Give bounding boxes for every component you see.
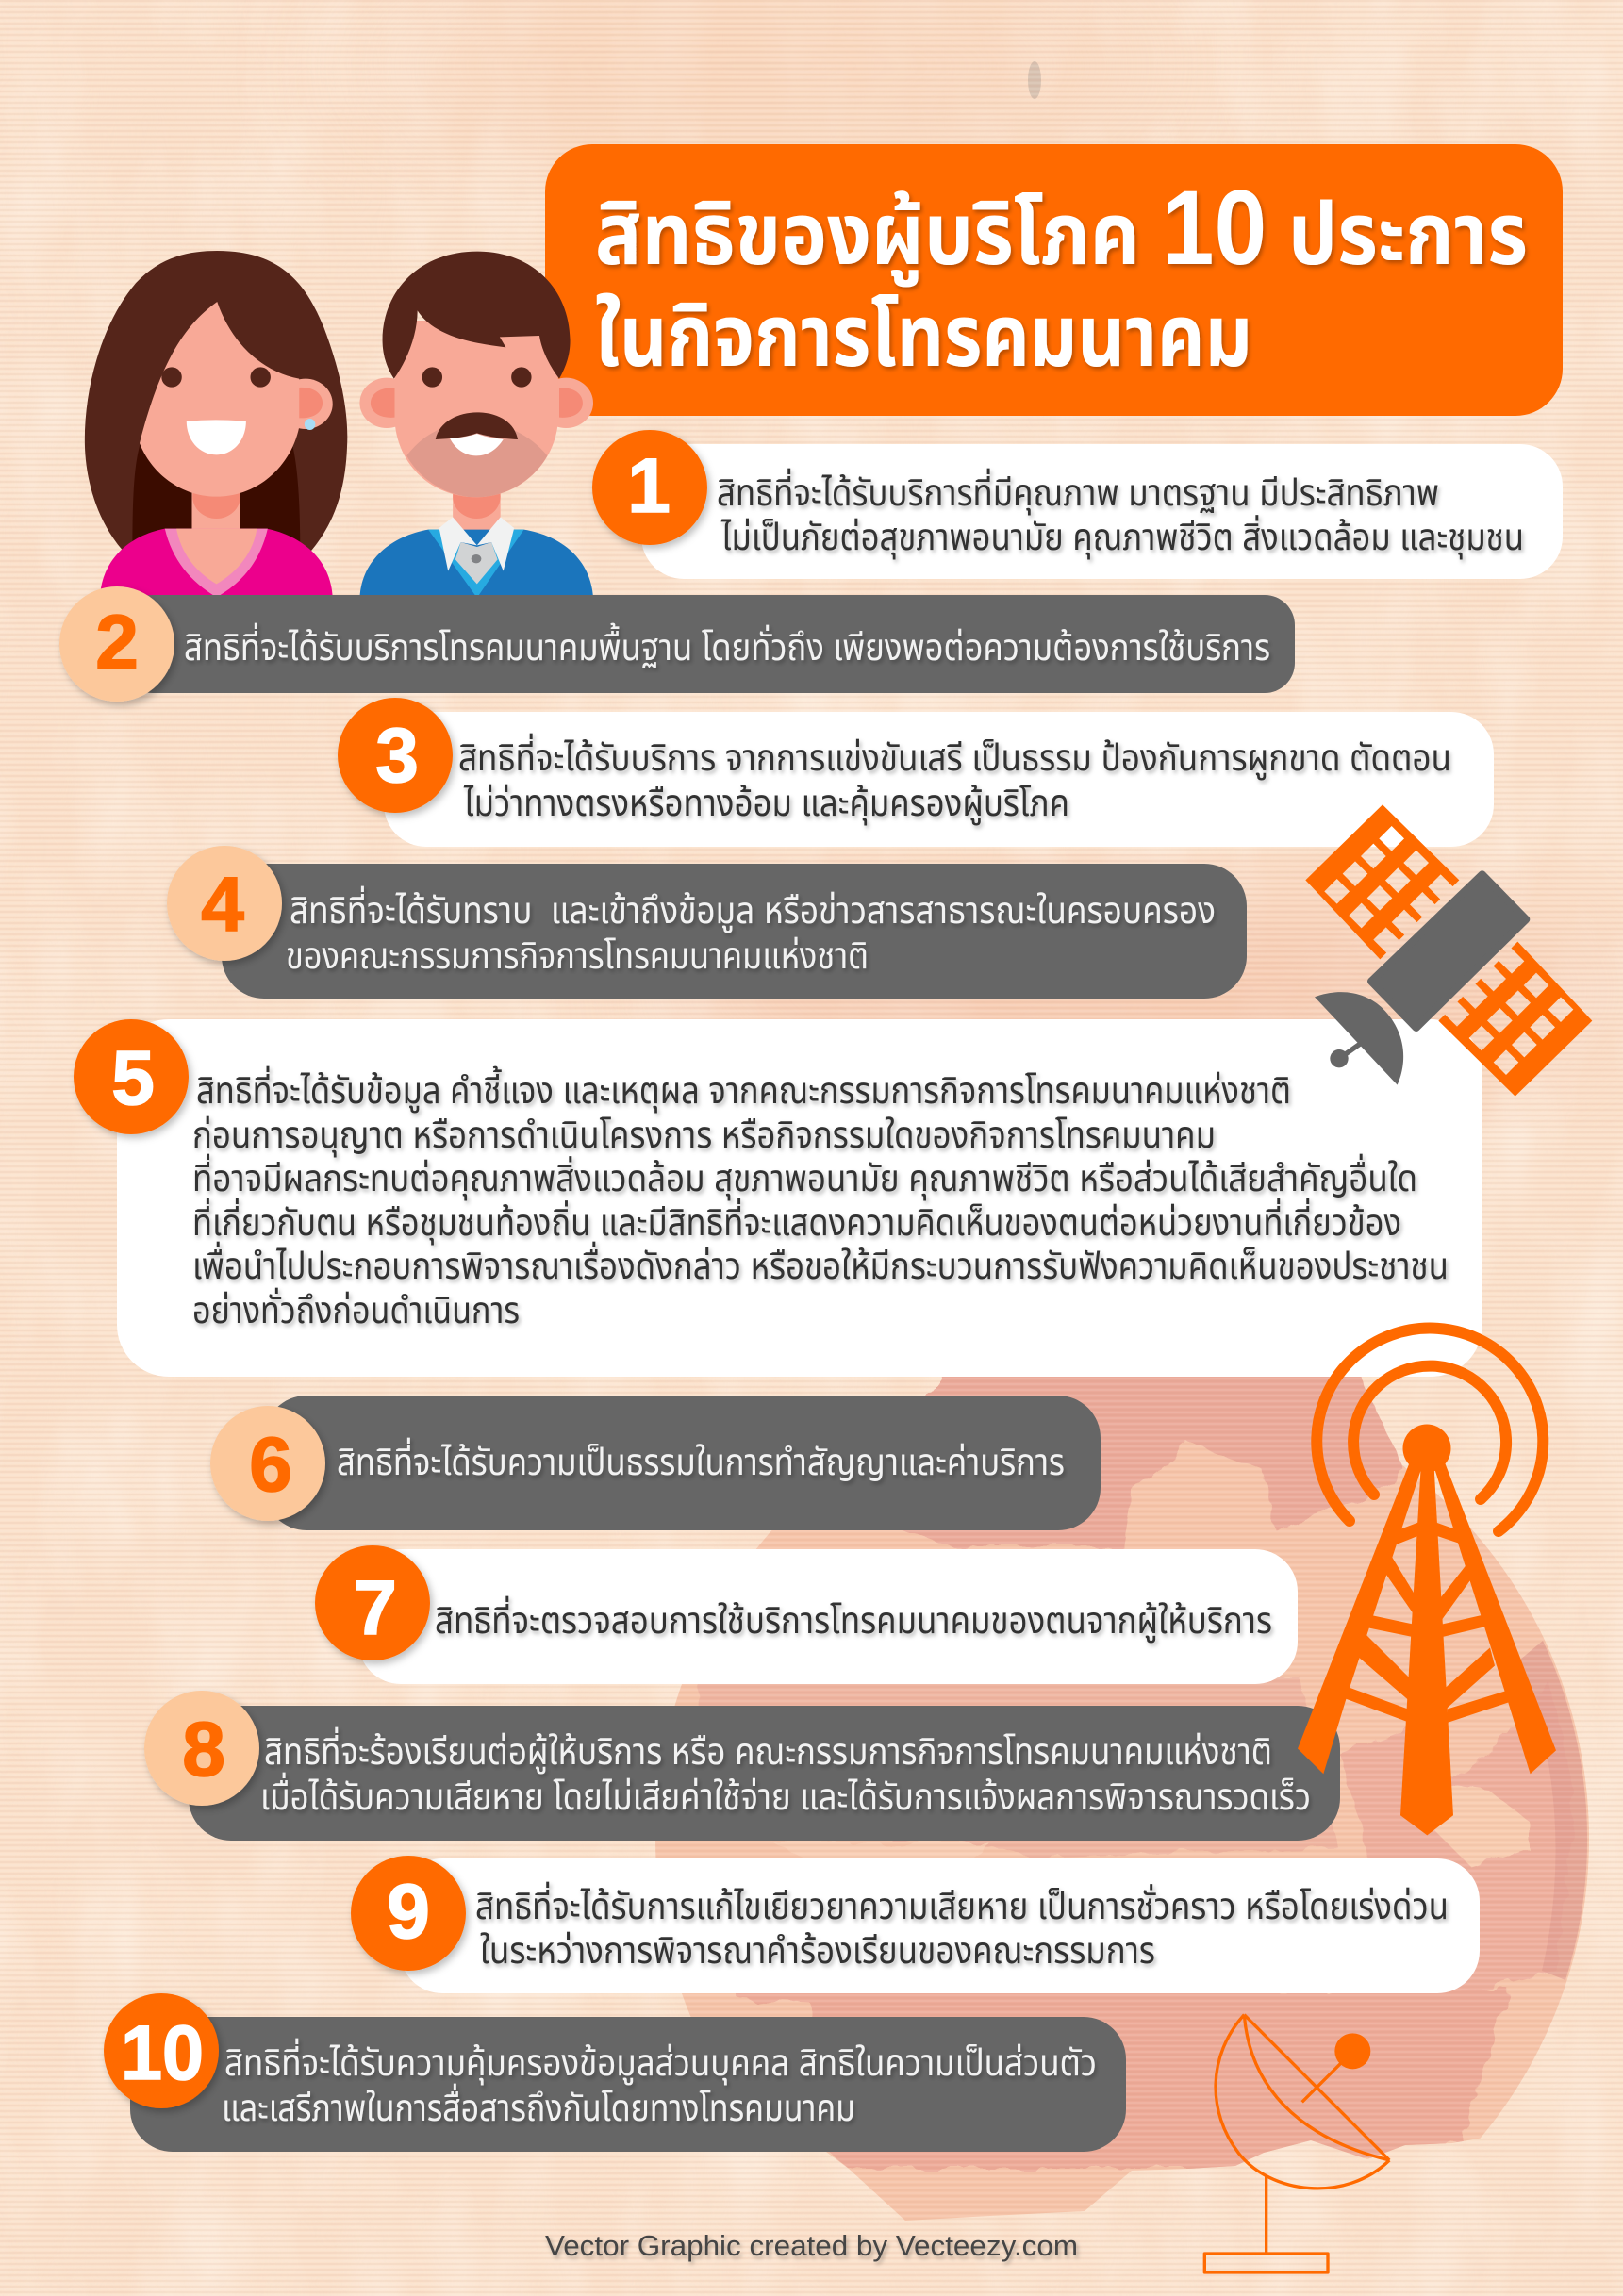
man [359,252,593,598]
text 9: ในระหว่างการพิจารณาคำร้องเรียนของคณะกรรมการ [480,1931,1155,1972]
text 5: ที่เกี่ยวกับตน หรือชุมชนท้องถิ่น และมีสิทธิที่จะแสดงความคิดเห็นของตนต่อหน่วยงานที่เกี่ยวข้อง [192,1198,1401,1245]
item 4 [167,846,1247,999]
text 10: และเสรีภาพในการสื่อสารถึงกันโดยทางโทรคมนาคม [222,2083,855,2129]
item 7 [315,1545,1298,1684]
icon: radio tower [1298,1329,1556,1835]
text 10: สิทธิที่จะได้รับความคุ้มครองข้อมูลส่วนบุคคล สิทธิในความเป็นส่วนตัว [224,2038,1097,2085]
text 5: สิทธิที่จะได้รับข้อมูล คำชี้แจง และเหตุผล จากคณะกรรมการกิจการโทรคมนาคมแห่งชาติ [196,1065,1291,1113]
text 8: สิทธิที่จะร้องเรียนต่อผู้ให้บริการ หรือ คณะกรรมการกิจการโทรคมนาคมแห่งชาติ [264,1726,1272,1774]
text 1: ไม่เป็นภัยต่อสุขภาพอนามัย คุณภาพชีวิต สิ่งแวดล้อม และชุมชน [720,514,1524,559]
text 1 [717,468,1524,559]
badge 6: 6 [249,1422,292,1508]
item 2 [59,586,1295,702]
footer credit: Vector Graphic created by Vecteezy.com [545,2229,1078,2262]
text 4 [286,885,1216,977]
text 4: สิทธิที่จะได้รับทราบ และเข้าถึงข้อมูล หรือข่าวสารสาธารณะในครอบครอง [290,885,1216,933]
badge 2: 2 [95,600,139,685]
text 8 [260,1726,1311,1818]
badge 1 [592,430,707,545]
item 5 [74,1019,1482,1377]
text 4: ของคณะกรรมการกิจการโทรคมนาคมแห่งชาติ [286,936,869,977]
text 5: เพื่อนำไปประกอบการพิจารณาเรื่องดังกล่าว หรือขอให้มีกระบวนการรับฟังความคิดเห็นของประชาชน [192,1241,1449,1287]
title banner [545,144,1563,416]
badge 9 [351,1856,466,1971]
badge 7 [315,1545,430,1660]
illustration: woman and man [85,251,593,598]
badge 10 [104,1993,219,2108]
item 1 [592,430,1563,579]
badge 10: 10 [121,2010,204,2096]
text 6: สิทธิที่จะได้รับความเป็นธรรมในการทำสัญญาและค่าบริการ [337,1437,1065,1483]
text 1: สิทธิที่จะได้รับบริการที่มีคุณภาพ มาตรฐาน มีประสิทธิภาพ [717,468,1439,515]
title text: ในกิจการโทรคมนาคม [595,289,1252,385]
text 2: สิทธิที่จะได้รับบริการโทรคมนาคมพื้นฐาน โดยทั่วถึง เพียงพอต่อความต้องการใช้บริการ [184,622,1270,669]
text 8: เมื่อได้รับความเสียหาย โดยไม่เสียค่าใช้จ่าย และได้รับการแจ้งผลการพิจารณารวดเร็ว [260,1772,1311,1818]
text 5: อย่างทั่วถึงก่อนดำเนินการ [192,1287,520,1331]
title text [595,169,1528,385]
icon: satellite dish [1204,2015,1389,2272]
text 3: ไม่ว่าทางตรงหรือทางอ้อม และคุ้มครองผู้บริโภค [463,784,1069,825]
item 10 [104,1993,1126,2152]
text 7: สิทธิที่จะตรวจสอบการใช้บริการโทรคมนาคมของตนจากผู้ให้บริการ [435,1595,1272,1643]
badge 1: 1 [627,443,671,529]
badge 3: 3 [375,713,419,799]
text 9: สิทธิที่จะได้รับการแก้ไขเยียวยาความเสียหาย เป็นการชั่วคราว หรือโดยเร่งด่วน [475,1881,1449,1927]
badge 9: 9 [387,1869,430,1955]
badge 8 [144,1691,259,1806]
title text: สิทธิของผู้บริโภค 10 ประการ [595,169,1528,288]
badge 4 [167,846,282,961]
item 8 [144,1691,1340,1841]
text 9 [475,1881,1449,1972]
badge 4: 4 [201,862,244,948]
text 5: ที่อาจมีผลกระทบต่อคุณภาพสิ่งแวดล้อม สุขภาพอนามัย คุณภาพชีวิต หรือส่วนได้เสียสำคัญอื่นใด [192,1153,1417,1200]
badge 3 [338,698,453,813]
background: globe [655,1372,1589,2296]
item 3 [338,698,1494,847]
text 3: สิทธิที่จะได้รับบริการ จากการแข่งขันเสรี เป็นธรรม ป้องกันการผูกขาด ตัดตอน [458,733,1451,780]
text 10 [222,2038,1097,2129]
badge 8: 8 [182,1707,225,1792]
woman [85,251,347,598]
item 9 [351,1856,1480,1993]
text 3 [458,733,1451,825]
badge 5 [74,1019,189,1134]
badge 2 [59,586,174,702]
text 5: ก่อนการอนุญาต หรือการดำเนินโครงการ หรือกิจกรรมใดของกิจการโทรคมนาคม [192,1115,1216,1157]
icon: satellite [1305,804,1592,1097]
item 6 [210,1396,1101,1530]
badge 7: 7 [354,1565,397,1651]
badge 6 [210,1406,325,1521]
badge 5: 5 [111,1035,155,1121]
text 5 [192,1065,1449,1331]
